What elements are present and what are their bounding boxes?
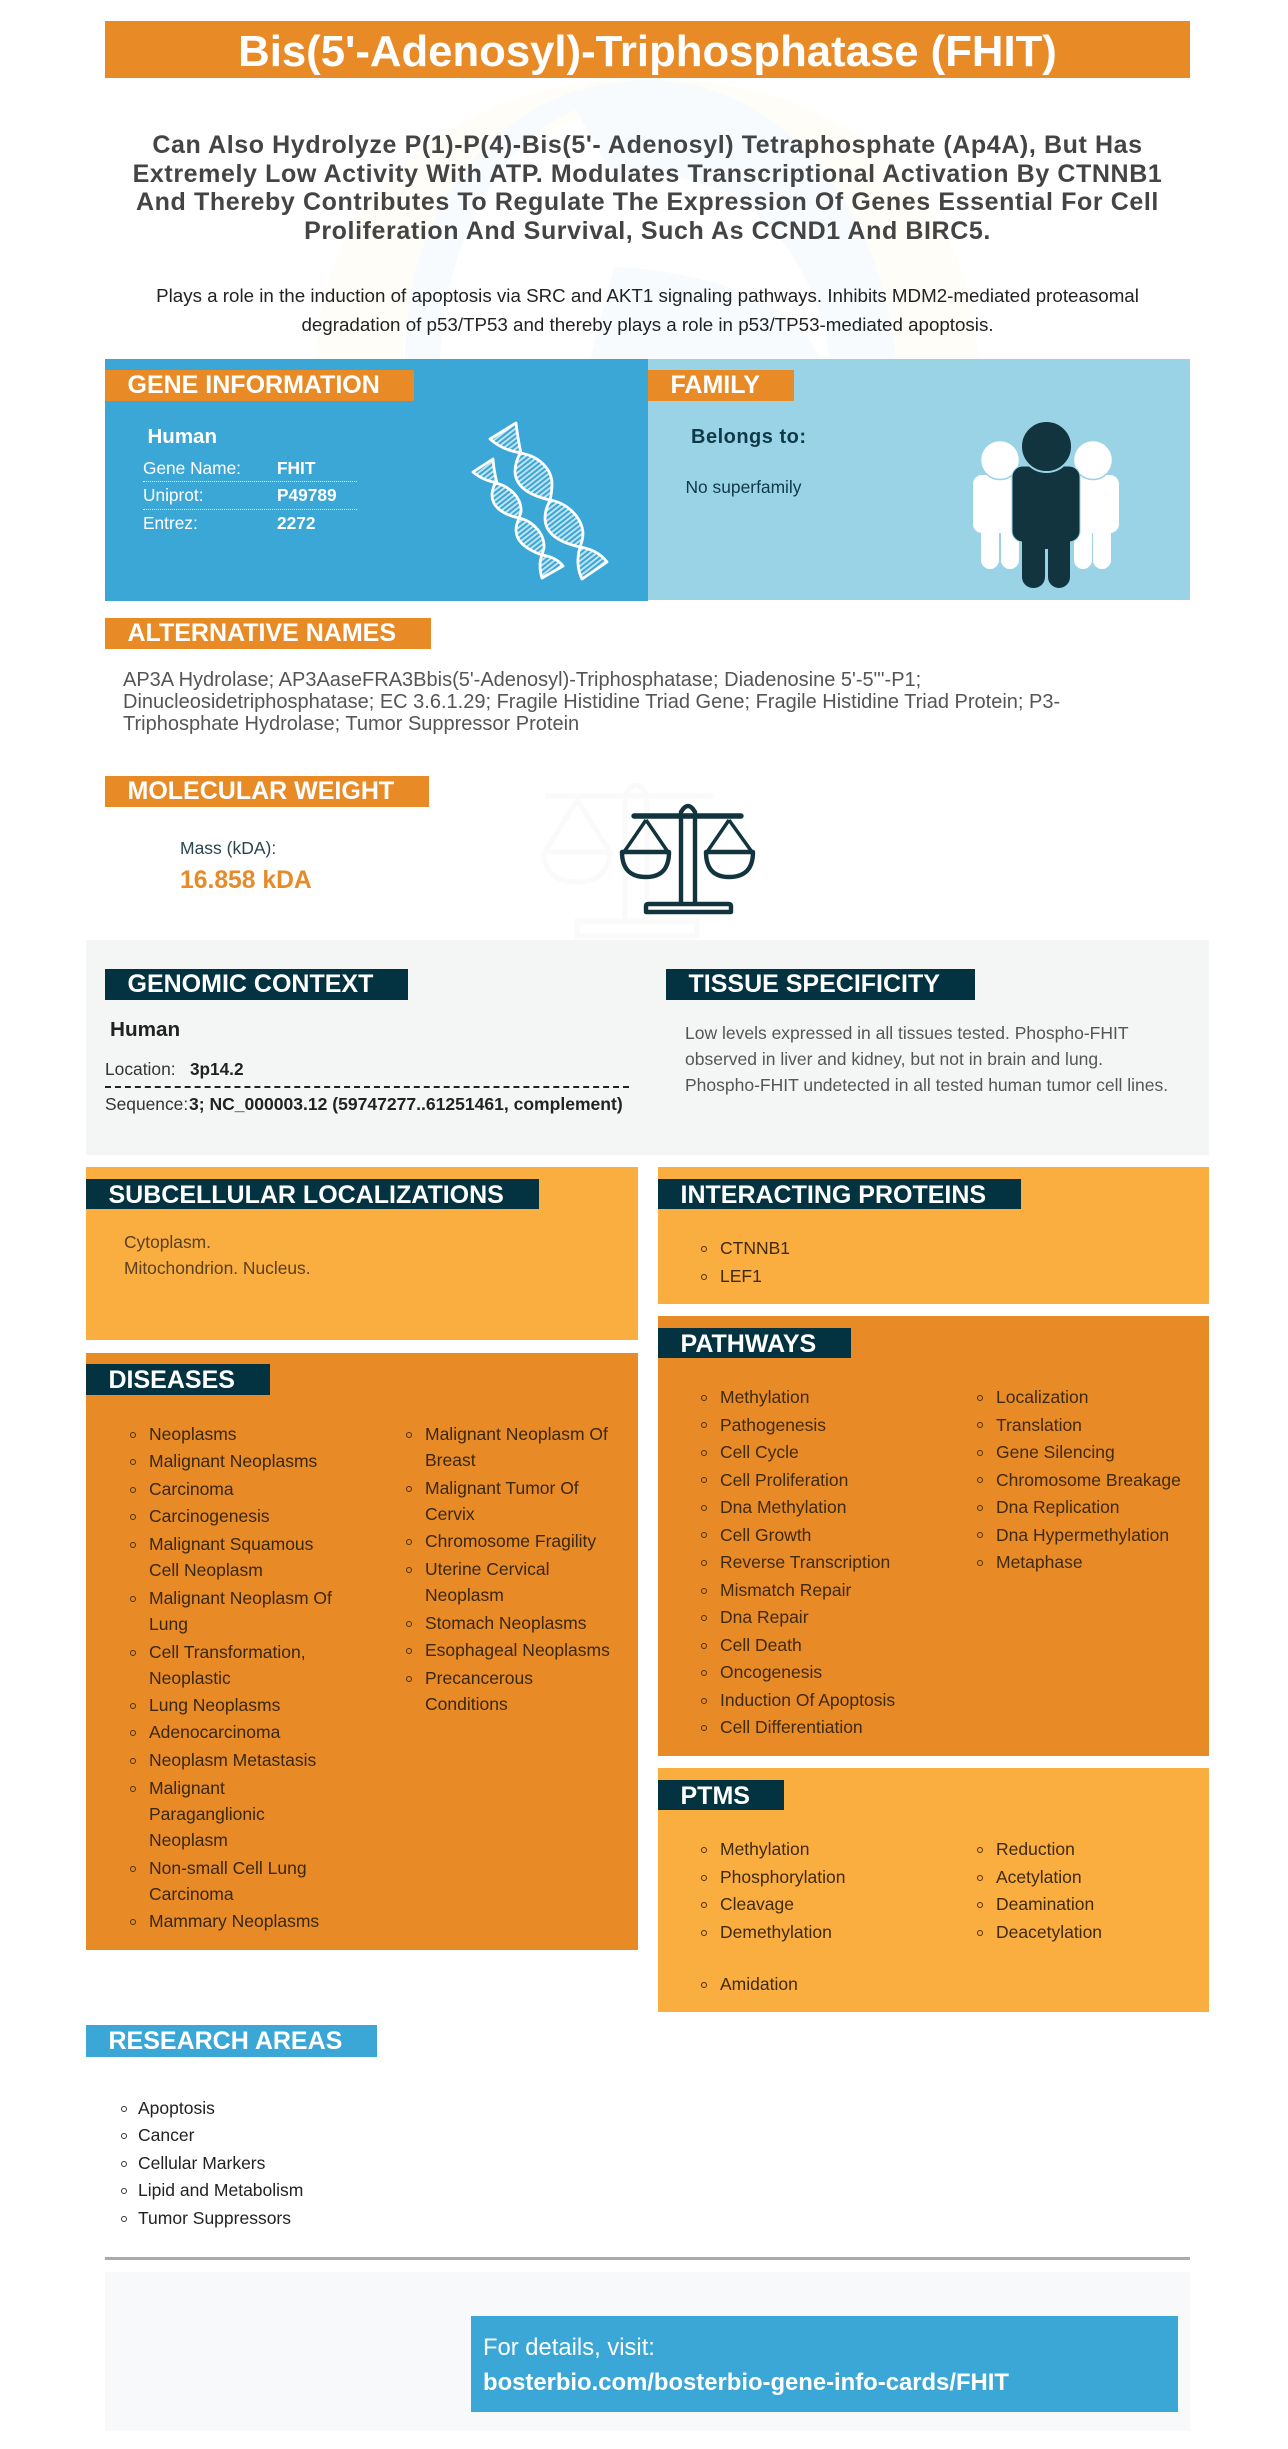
localization text	[124, 1232, 311, 1278]
list: diseases column one: Neoplasm Metastasis	[149, 1750, 316, 1770]
list: research areas: Cellular Markers	[138, 2153, 265, 2173]
list: research areas: Apoptosis	[138, 2098, 215, 2118]
summary heading: And Thereby Contributes To Regulate The Expression Of Genes Essential For Cell	[136, 188, 1159, 216]
entrez row	[143, 513, 315, 533]
gene name row: FHIT	[277, 458, 315, 478]
list: ptms column one: Methylation	[720, 1839, 810, 1859]
list: diseases column two	[406, 1424, 610, 1714]
list: proteins: LEF1	[720, 1266, 762, 1286]
list: ptms column two: Acetylation	[996, 1867, 1082, 1887]
panel: family	[648, 359, 1190, 600]
location row	[105, 1059, 244, 1079]
heading: gene information: GENE INFORMATION	[128, 371, 380, 399]
list: ptms column one: Amidation	[720, 1974, 798, 1994]
list: diseases column one: Cell Neoplasm	[149, 1560, 263, 1580]
heading: alternative names: ALTERNATIVE NAMES	[128, 619, 396, 647]
list: proteins	[701, 1238, 790, 1286]
panel: genomic context and tissue specificity: 3; NC_000003.12 (59747277..61251461, complement)	[189, 1094, 623, 1114]
panel: subcellular localizations	[86, 1167, 638, 1340]
list: pathways column one: Dna Methylation	[720, 1497, 846, 1517]
icon: dna helices	[472, 422, 608, 580]
callout url: bosterbio.com/bosterbio-gene-info-cards/FHIT	[483, 2369, 1009, 2396]
list: diseases column one: Malignant Neoplasm Of	[149, 1588, 332, 1608]
list: diseases column one: Mammary Neoplasms	[149, 1911, 319, 1931]
list: diseases column two: Esophageal Neoplasms	[425, 1640, 610, 1660]
panel: ptms	[658, 1768, 1209, 2012]
panel: genomic context and tissue specificity	[86, 940, 1209, 1155]
list: ptms column one: Demethylation	[720, 1922, 832, 1942]
panel: gene information	[105, 359, 648, 601]
heading: tissue specificity: TISSUE SPECIFICITY	[688, 970, 940, 998]
list: pathways column one: Cell Proliferation	[720, 1470, 848, 1490]
localization text: Mitochondrion. Nucleus.	[124, 1258, 311, 1278]
gene name row: Gene Name:	[143, 458, 241, 478]
list: research areas: Tumor Suppressors	[138, 2208, 291, 2228]
uniprot row: Uniprot:	[143, 485, 204, 505]
tissue specificity text: Low levels expressed in all tissues tested. Phospho-FHIT	[685, 1023, 1129, 1043]
callout intro text: For details, visit:	[483, 2334, 655, 2361]
list: pathways column one: Pathogenesis	[720, 1414, 826, 1434]
watermark logo	[300, 70, 1000, 365]
list: diseases column one: Lung Neoplasms	[149, 1695, 280, 1715]
list: diseases column one: Paraganglionic	[149, 1804, 265, 1824]
list: pathways column one: Oncogenesis	[720, 1662, 822, 1682]
list: pathways column two: Metaphase	[996, 1552, 1083, 1572]
list: diseases column two: Breast	[425, 1450, 476, 1470]
heading: research areas: RESEARCH AREAS	[108, 2027, 342, 2055]
list: diseases column one: Non-small Cell Lung	[149, 1858, 307, 1878]
watermark scale	[530, 775, 730, 940]
heading: pathways	[658, 1328, 851, 1358]
list: ptms column two: Deacetylation	[996, 1922, 1102, 1942]
heading: family: FAMILY	[670, 371, 760, 399]
list: diseases column one: Cell Transformation,	[149, 1642, 306, 1662]
alternative names text: Dinucleosidetriphosphatase; EC 3.6.1.29; Fragile Histidine Triad Gene; Fragile Histidine Triad Protein; P3-	[123, 691, 1060, 713]
panel: pathways	[658, 1316, 1209, 1756]
heading: subcellular localizations: SUBCELLULAR LOCALIZATIONS	[108, 1181, 504, 1209]
heading: diseases	[86, 1364, 270, 1395]
uniprot row: P49789	[277, 485, 337, 505]
alternative names text: Triphosphate Hydrolase; Tumor Suppressor Protein	[123, 713, 579, 735]
list: pathways column one: Methylation	[720, 1387, 810, 1407]
list: diseases column two: Uterine Cervical	[425, 1559, 549, 1579]
list: research areas: Cancer	[138, 2125, 194, 2145]
tissue specificity text: observed in liver and kidney, but not in brain and lung.	[685, 1049, 1103, 1069]
list: diseases column one: Carcinogenesis	[149, 1506, 270, 1526]
title banner	[105, 21, 1190, 78]
entrez row: Entrez:	[143, 513, 198, 533]
list: diseases column two: Stomach Neoplasms	[425, 1613, 586, 1633]
superfamily value: No superfamily	[686, 477, 801, 497]
list: diseases column one: Malignant Neoplasms	[149, 1451, 317, 1471]
heading: ptms	[658, 1780, 784, 1810]
icon: balance scale	[620, 804, 756, 914]
mass label: Mass (kDA):	[180, 838, 276, 858]
list: pathways column one	[701, 1387, 895, 1737]
list: pathways column one: Induction Of Apoptosis	[720, 1690, 895, 1710]
heading: pathways: PATHWAYS	[680, 1330, 816, 1358]
panel: diseases	[86, 1353, 638, 1950]
heading: family	[648, 370, 794, 401]
list: pathways column two	[977, 1387, 1181, 1572]
summary heading: Can Also Hydrolyze P(1)-P(4)-Bis(5'- Adenosyl) Tetraphosphate (Ap4A), But Has	[152, 131, 1143, 159]
list: pathways column two: Dna Replication	[996, 1497, 1120, 1517]
list: pathways column two: Translation	[996, 1414, 1082, 1434]
dashed separator	[105, 1086, 629, 1088]
list: research areas	[121, 2098, 303, 2228]
tissue specificity text: Phospho-FHIT undetected in all tested human tumor cell lines.	[685, 1075, 1168, 1095]
list: pathways column two: Localization	[996, 1387, 1088, 1407]
list: pathways column one: Cell Differentiation	[720, 1717, 863, 1737]
list: diseases column two: Neoplasm	[425, 1585, 504, 1605]
list: diseases column one: Carcinoma	[149, 1884, 234, 1904]
list: pathways column one: Dna Repair	[720, 1607, 809, 1627]
list: ptms column one: Phosphorylation	[720, 1867, 846, 1887]
list: diseases column one: Neoplasm	[149, 1830, 228, 1850]
description paragraph: degradation of p53/TP53 and thereby plays a role in p53/TP53-mediated apoptosis.	[301, 314, 994, 335]
list: pathways column two: Chromosome Breakage	[996, 1470, 1181, 1490]
description paragraph	[156, 285, 1139, 335]
heading: molecular weight: MOLECULAR WEIGHT	[128, 777, 394, 805]
list: ptms column one	[701, 1839, 846, 1994]
callout: details link	[471, 2316, 1178, 2412]
heading: genomic context: GENOMIC CONTEXT	[128, 970, 373, 998]
icon: three people	[973, 422, 1119, 588]
list: diseases column two: Precancerous	[425, 1668, 533, 1688]
panel: interacting proteins	[658, 1167, 1209, 1304]
description paragraph: Plays a role in the induction of apoptosis via SRC and AKT1 signaling pathways. Inhibits MDM2-mediated proteasomal	[156, 285, 1139, 306]
list: pathways column two: Dna Hypermethylation	[996, 1524, 1169, 1544]
heading: diseases: DISEASES	[108, 1366, 235, 1394]
list: research areas: Lipid and Metabolism	[138, 2180, 303, 2200]
list: diseases column one: Lung	[149, 1614, 188, 1634]
list: diseases column one: Malignant Squamous	[149, 1534, 313, 1554]
summary heading	[133, 131, 1162, 245]
list: proteins: CTNNB1	[720, 1238, 790, 1258]
heading: ptms: PTMS	[680, 1782, 750, 1810]
list: ptms column two	[977, 1839, 1102, 1942]
list: diseases column one: Neoplasms	[149, 1424, 237, 1444]
heading: interacting proteins: INTERACTING PROTEINS	[680, 1181, 986, 1209]
list: ptms column two: Deamination	[996, 1894, 1094, 1914]
list: diseases column one: Malignant	[149, 1778, 225, 1798]
list: diseases column one: Adenocarcinoma	[149, 1722, 280, 1742]
species: Human	[148, 425, 217, 448]
alternative names text: AP3A Hydrolase; AP3AaseFRA3Bbis(5'-Adenosyl)-Triphosphatase; Diadenosine 5'-5"'-P1;	[123, 669, 921, 691]
list: diseases column one: Neoplastic	[149, 1668, 231, 1688]
list: pathways column one: Cell Growth	[720, 1524, 811, 1544]
sequence row	[105, 1094, 623, 1114]
list: pathways column one: Cell Death	[720, 1635, 802, 1655]
entrez row: 2272	[277, 513, 315, 533]
summary heading: Proliferation And Survival, Such As CCND1 And BIRC5.	[304, 217, 991, 245]
species: Human	[110, 1018, 180, 1041]
list: diseases column two: Malignant Neoplasm Of	[425, 1424, 608, 1444]
summary heading: Extremely Low Activity With ATP. Modulates Transcriptional Activation By CTNNB1	[133, 160, 1162, 188]
title banner: Bis(5'-Adenosyl)-Triphosphatase (FHIT)	[238, 27, 1057, 76]
sequence row: Sequence:	[105, 1094, 188, 1114]
uniprot row	[143, 483, 357, 510]
footer panel	[105, 2272, 1190, 2431]
localization text: Cytoplasm.	[124, 1232, 211, 1252]
panel: genomic context and tissue specificity: 3p14.2	[190, 1059, 244, 1079]
list: diseases column two: Chromosome Fragility	[425, 1531, 596, 1551]
list: diseases column one	[130, 1424, 332, 1931]
belongs to label: Belongs to:	[691, 426, 806, 448]
list: diseases column two: Cervix	[425, 1504, 475, 1524]
list: ptms column one: Cleavage	[720, 1894, 794, 1914]
location row: Location:	[105, 1059, 176, 1079]
list: pathways column two: Gene Silencing	[996, 1442, 1115, 1462]
list: pathways column one: Cell Cycle	[720, 1442, 799, 1462]
list: diseases column one: Carcinoma	[149, 1479, 234, 1499]
alternative names text	[123, 669, 1060, 735]
list: pathways column one: Mismatch Repair	[720, 1580, 851, 1600]
gene name row	[143, 456, 357, 482]
tissue specificity text	[685, 1023, 1168, 1095]
list: ptms column two: Reduction	[996, 1839, 1075, 1859]
list: diseases column two: Malignant Tumor Of	[425, 1478, 579, 1498]
list: pathways column one: Reverse Transcription	[720, 1552, 890, 1572]
mass value: 16.858 kDA	[180, 867, 312, 894]
list: diseases column two: Conditions	[425, 1694, 508, 1714]
